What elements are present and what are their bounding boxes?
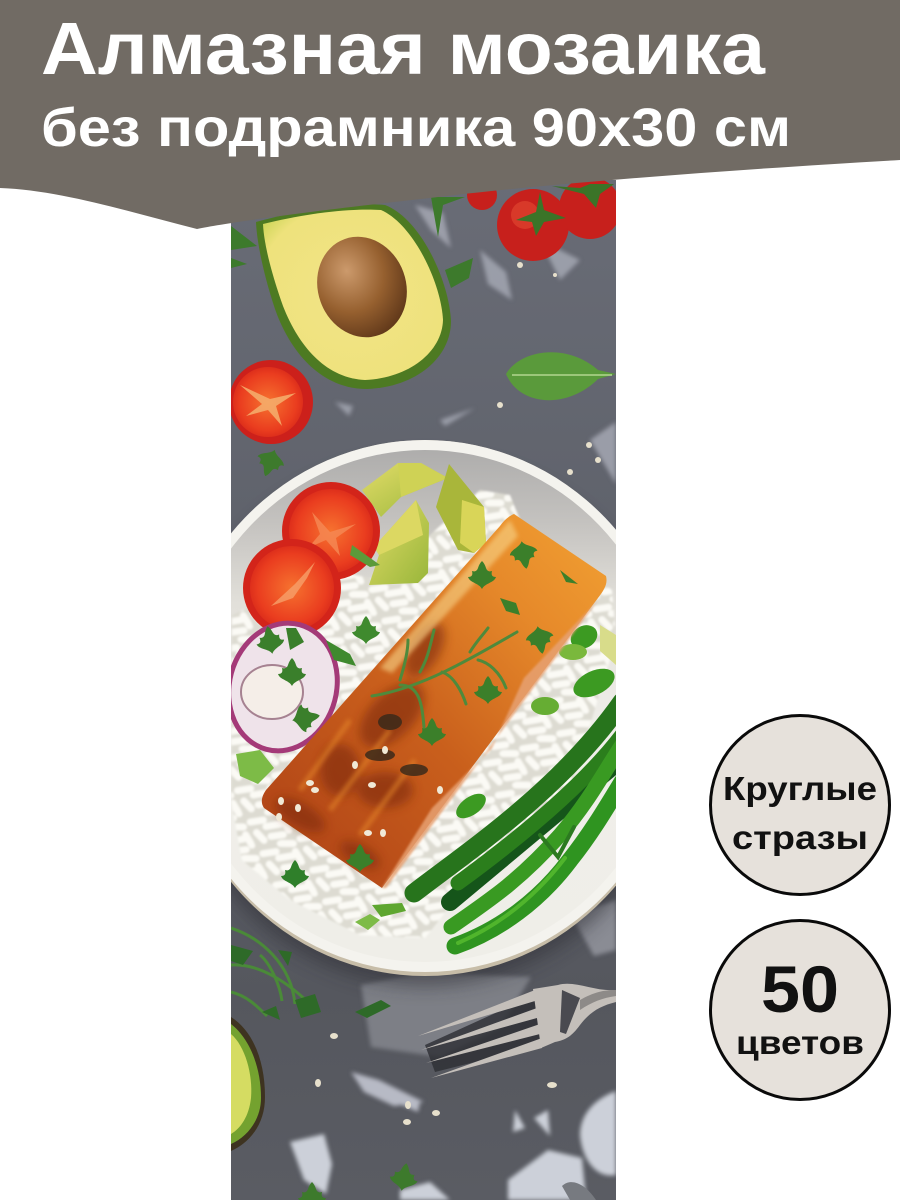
plate shadow [231, 882, 616, 995]
icon: basil leaf [506, 352, 616, 400]
header banner [0, 0, 900, 229]
icon: avocado half [256, 204, 451, 389]
icon: peas and edamame [236, 620, 619, 930]
plate [231, 440, 616, 976]
badge: 50 colours [710, 920, 890, 1100]
panel: product picture [231, 180, 616, 1200]
icon: green beans [414, 702, 622, 946]
icon: red onion [231, 620, 340, 754]
rice [231, 490, 616, 938]
title: Алмазная мозаика [41, 7, 766, 90]
icon: knife tip [562, 1182, 596, 1200]
sesame seeds [276, 746, 443, 837]
icon: small herbs [231, 197, 473, 1200]
icon: herb by onion [326, 616, 380, 666]
icon: tomato half left [229, 360, 313, 444]
sesame and pepper crumbs [315, 262, 601, 1125]
icon: avocado slices [362, 463, 486, 585]
table scuffs [290, 205, 616, 1200]
icon: fork [418, 984, 616, 1078]
icon: salmon fillet [262, 514, 607, 888]
badge: 50 colours: 50 [761, 952, 839, 1026]
salmon glaze highlight [380, 520, 518, 673]
rosemary sprig [372, 628, 517, 727]
badge: round rhinestones: стразы [732, 819, 868, 856]
icon: cherry tomatoes top [467, 177, 621, 261]
icon: herb sprigs bottom left [231, 928, 391, 1020]
icon: tomato slices in bowl [243, 482, 380, 637]
salmon herbs [418, 539, 578, 746]
subtitle: без подрамника 90х30 см [41, 98, 791, 158]
icon: avocado bottom left [231, 1017, 265, 1151]
salmon flesh edge [382, 600, 598, 888]
icon: parsley on rice [281, 860, 309, 888]
salmon caramel patches [270, 617, 453, 875]
badge: 50 colours: цветов [736, 1024, 864, 1061]
badge: round rhinestones: Круглые [723, 770, 877, 807]
badge: round rhinestones [710, 716, 890, 894]
